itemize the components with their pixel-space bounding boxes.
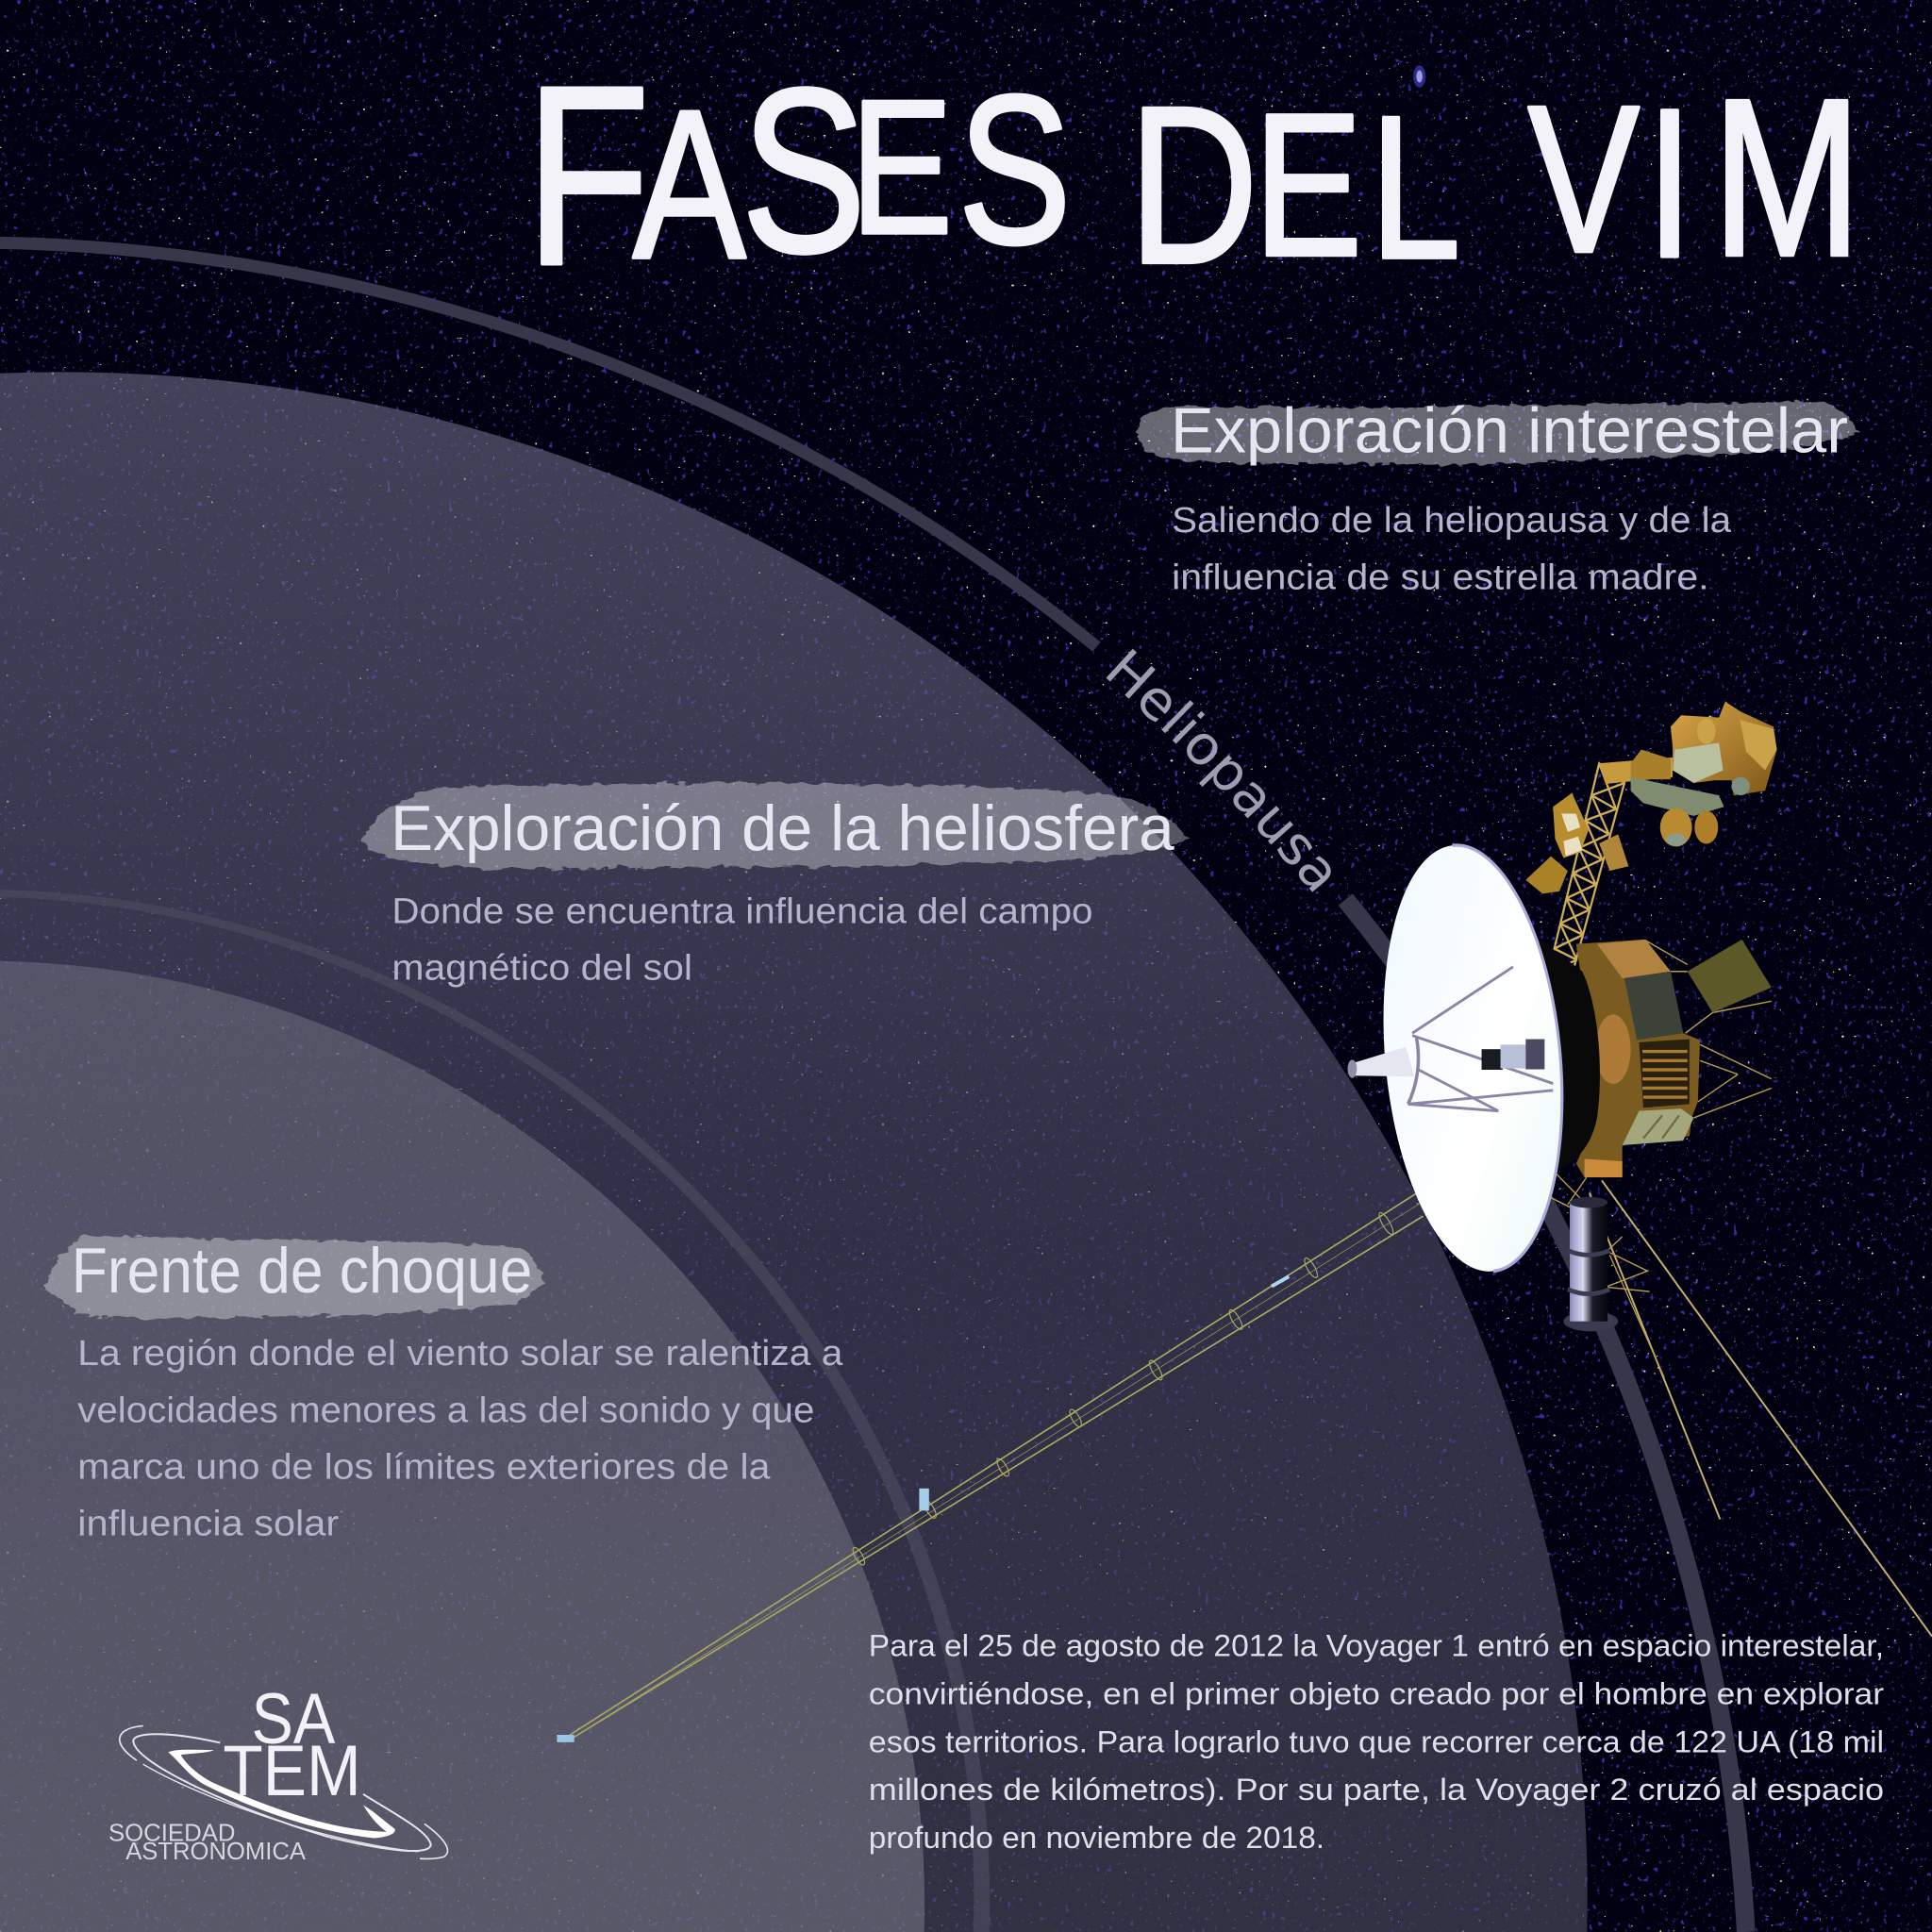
magnetometer boom xyxy=(557,1189,1424,1742)
spacecraft: instrument boom truss xyxy=(1549,763,1624,983)
heading: Exploración interestelar xyxy=(1171,395,1848,466)
spacecraft: dish back xyxy=(1534,935,1600,1172)
description: magnético del sol xyxy=(391,948,692,988)
description: Saliendo de la heliopausa y de la xyxy=(1172,501,1732,541)
title: E xyxy=(1254,72,1362,299)
spacecraft: rear wires xyxy=(1547,941,1772,1377)
logo: SATEM xyxy=(108,1679,447,1865)
logo: wordmark TEM: TEM xyxy=(223,1731,361,1811)
description: velocidades menores a las del sonido y que xyxy=(77,1391,814,1430)
spacecraft: feed struts xyxy=(1408,967,1553,1111)
panel: frente de choque xyxy=(44,1236,843,1543)
spacecraft: high gain antenna dish xyxy=(1365,836,1580,1281)
title: M xyxy=(1712,52,1861,303)
logo: wordmark SA: SA xyxy=(251,1679,336,1759)
description: influencia de su estrella madre. xyxy=(1172,558,1709,597)
description: influencia solar xyxy=(77,1504,339,1543)
heading: Frente de choque xyxy=(72,1236,532,1307)
brush highlight xyxy=(44,1236,544,1319)
text block: Voyager paragraph xyxy=(869,1627,1884,1855)
spacecraft: feed cone xyxy=(1348,1047,1414,1078)
brush highlight xyxy=(362,782,1189,869)
region: heliosphere xyxy=(0,372,1588,1932)
description xyxy=(1172,501,1732,597)
antenna wires xyxy=(1590,1180,1932,1637)
label: heliopausa: Heliopausa xyxy=(1106,649,1331,892)
title: F xyxy=(525,32,650,318)
title: I xyxy=(1646,66,1693,302)
spacecraft: subreflector cylinder xyxy=(1482,1040,1544,1070)
text block: Voyager paragraph: convirtiéndose, en el primer objeto creado por el hombre en explorar xyxy=(869,1675,1884,1710)
title: A xyxy=(633,67,746,304)
text block: Voyager paragraph: Para el 25 de agosto de 2012 la Voyager 1 entró en espacio interestelar, xyxy=(869,1627,1884,1662)
region: heliopause ring xyxy=(0,242,1746,1932)
heading: Exploración de la heliosfera xyxy=(391,793,1174,864)
logo: Astronómica: ASTRONOMICA xyxy=(125,1837,306,1865)
logo: Sociedad: SOCIEDAD xyxy=(108,1818,235,1846)
text block: Voyager paragraph: esos territorios. Para lograrlo tuvo que recorrer cerca de 122 UA (18 mil xyxy=(869,1724,1884,1758)
spacecraft: side panel xyxy=(1688,940,1772,1012)
text block: Voyager paragraph: profundo en noviembre de 2018. xyxy=(869,1820,1324,1855)
text block: Voyager paragraph: millones de kilómetros). Por su parte, la Voyager 2 cruzó al espacio xyxy=(869,1772,1884,1807)
brush highlight xyxy=(1137,402,1858,464)
title: E xyxy=(851,60,953,274)
spacecraft: Voyager xyxy=(1348,702,1777,1377)
description: marca uno de los límites exteriores de la xyxy=(77,1447,771,1487)
logo: rings xyxy=(120,1725,447,1858)
spacecraft: instruments xyxy=(1525,702,1777,893)
panel: exploración de la heliosfera xyxy=(362,782,1189,988)
title: V xyxy=(1528,61,1640,296)
panel: exploración interestelar xyxy=(1137,395,1858,597)
spacecraft: bus xyxy=(1576,940,1700,1177)
region: termination shock area xyxy=(0,961,924,1932)
spacecraft: RTG xyxy=(1563,1197,1618,1331)
description xyxy=(391,891,1093,988)
title: L xyxy=(1370,75,1460,301)
description: Donde se encuentra influencia del campo xyxy=(391,891,1093,931)
title: S xyxy=(741,40,866,301)
title: S xyxy=(958,52,1072,289)
region: inner ring xyxy=(0,890,990,1932)
description xyxy=(77,1334,843,1543)
description: La región donde el viento solar se ralentiza a xyxy=(77,1334,843,1374)
title: D xyxy=(1128,59,1258,310)
